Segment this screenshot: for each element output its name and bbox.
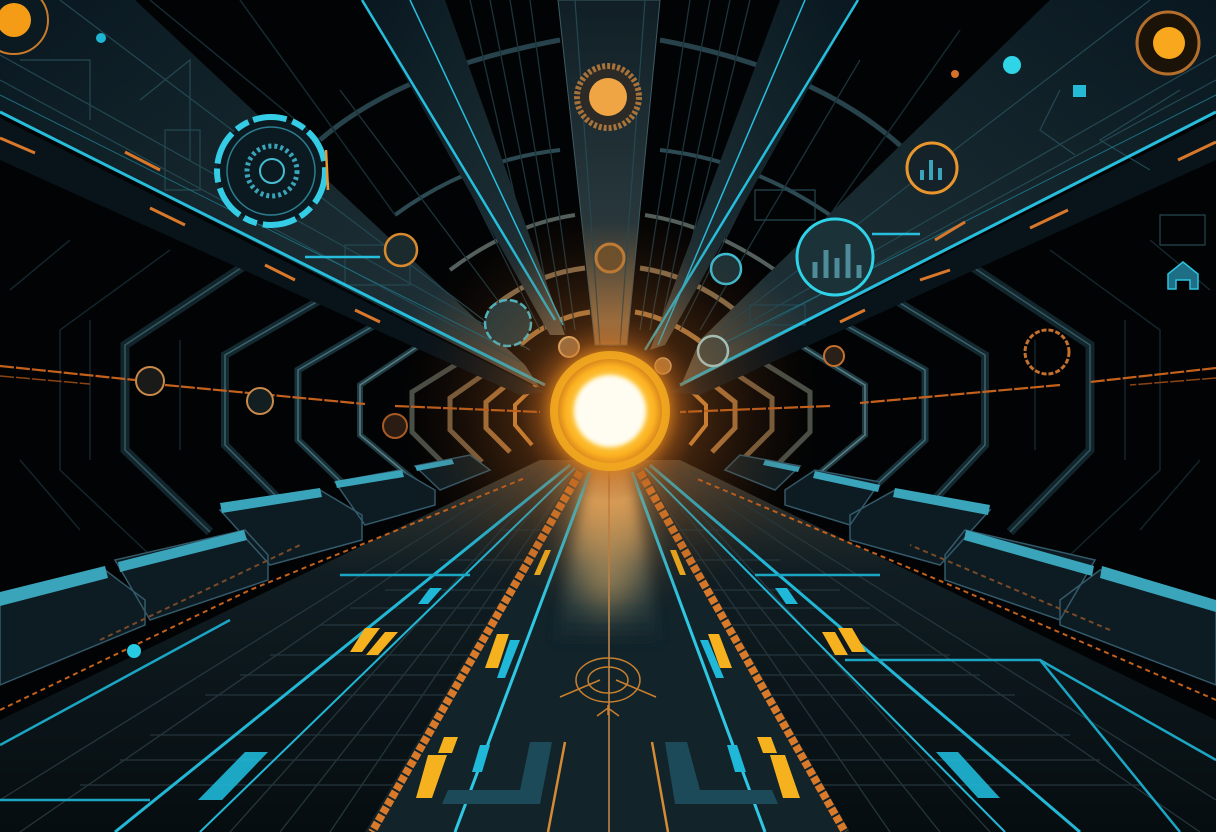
left cyan wall blocks [0, 459, 454, 606]
glowing cyan beam lines [0, 0, 1216, 385]
dot: upper right orange [951, 70, 959, 78]
side tunnel ribs right [685, 240, 1210, 555]
dot: lower left cyan [127, 644, 141, 658]
yellow floor markers [350, 550, 866, 798]
orange floor side traces [0, 478, 1216, 710]
dot: top right cyan [1003, 56, 1021, 74]
orb: top right [1137, 12, 1199, 74]
dot: top left cyan [96, 33, 106, 43]
orb: top left [0, 0, 48, 54]
cyan floor markers [198, 588, 1000, 800]
floor base [0, 460, 1216, 832]
floor grid [0, 470, 1216, 832]
central sun halo [400, 201, 820, 621]
icon: cyan gear medallion [217, 117, 328, 225]
horizontal orange wall traces [0, 366, 1216, 412]
floor emblem [560, 658, 656, 716]
left ceiling beam [0, 0, 540, 388]
icon: cyan chart circle [797, 219, 873, 295]
icon: house glyph [1168, 262, 1198, 289]
road glow [555, 470, 660, 640]
icon: top centre orange orb [577, 66, 639, 128]
cyan square [1073, 85, 1086, 97]
beam line details [0, 0, 1216, 362]
right ceiling beam [680, 0, 1216, 388]
slanted beam right [650, 0, 858, 350]
floor rails [0, 465, 1216, 832]
icon: small rings upper [136, 234, 1069, 438]
side lower machinery left [0, 455, 490, 685]
side lower machinery right [725, 455, 1216, 685]
floor bracket shapes [442, 742, 778, 804]
side tunnel ribs left [10, 240, 536, 555]
centre road [365, 470, 850, 832]
icon: orange ring chart [907, 143, 957, 193]
slanted beam left [362, 0, 565, 335]
orange beam accents [0, 138, 1216, 322]
ceiling ribs [150, 0, 1060, 345]
connector lines [305, 234, 920, 257]
right cyan wall blocks [763, 460, 1216, 612]
central sun [520, 321, 700, 501]
top centre beam [558, 0, 660, 345]
